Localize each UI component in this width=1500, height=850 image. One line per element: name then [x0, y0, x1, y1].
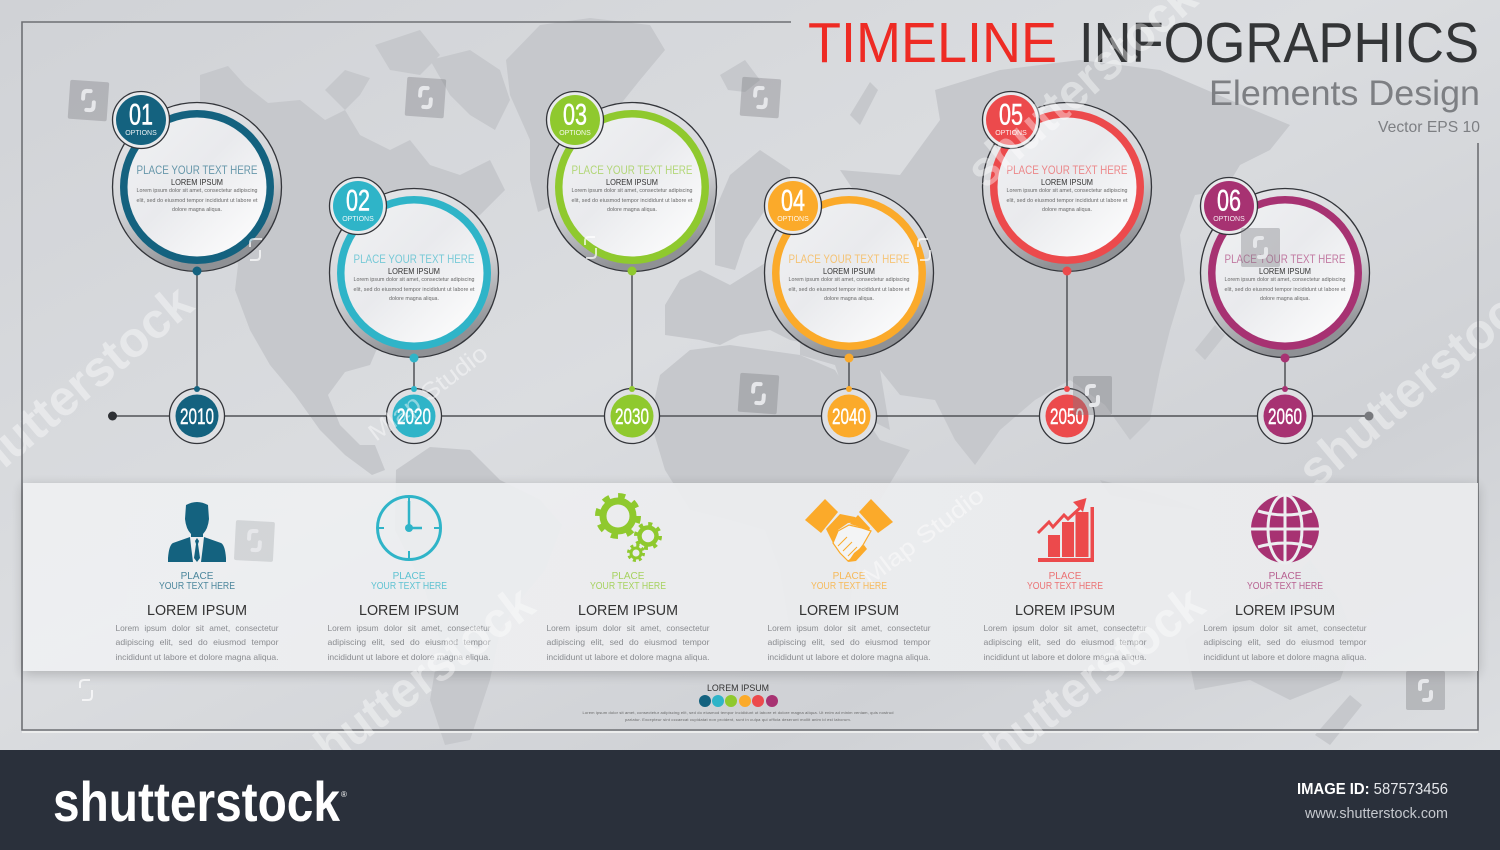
- column 4 text: Lorem ipsum dolor sit amet, consectetur: [768, 623, 931, 633]
- icon: gears: [598, 496, 660, 560]
- column 5 text: PLACE: [1049, 571, 1082, 582]
- milestone 01: 2010: [180, 404, 214, 429]
- milestone 04: [764, 178, 934, 444]
- column 4 text: incididunt ut labore et dolore magna aliqua.: [768, 652, 930, 662]
- column 2 text: Lorem ipsum dolor sit amet, consectetur: [328, 623, 491, 633]
- column 1 text: Lorem ipsum dolor sit amet, consectetur: [116, 623, 279, 633]
- watermark: studio lower: Mlap Studio: [857, 482, 989, 591]
- milestone 03: LOREM IPSUM: [606, 177, 658, 187]
- milestone 05: LOREM IPSUM: [1041, 177, 1093, 187]
- column 3 text: adipiscing elit, sed do eiusmod tempor: [546, 637, 710, 647]
- milestone 02: dolore magna aliqua.: [389, 296, 439, 302]
- milestone 04: OPTIONS: [777, 216, 809, 223]
- icon: clock: [378, 496, 440, 560]
- logo mark 3: [740, 77, 781, 118]
- panel: descriptions: [23, 483, 1478, 671]
- column 5 text: Lorem ipsum dolor sit amet, consectetur: [984, 623, 1147, 633]
- outline logo mark lower: [80, 680, 92, 700]
- milestone 04: dolore magna aliqua.: [824, 296, 874, 302]
- milestone 02: PLACE YOUR TEXT HERE: [354, 252, 474, 266]
- icon: growth chart: [1038, 498, 1094, 562]
- column 3 text: [546, 571, 710, 662]
- column 6 text: LOREM IPSUM: [1235, 602, 1335, 619]
- milestone 01: elit, sed do eiusmod tempor incididunt ut labore et: [136, 198, 258, 204]
- watermark: bottom right: shutterstock: [953, 574, 1214, 791]
- milestone 04: Lorem ipsum dolor sit amet, consectetur adipiscing: [788, 277, 910, 283]
- milestone 05: PLACE YOUR TEXT HERE: [1006, 163, 1128, 177]
- milestone 02: LOREM IPSUM: [388, 266, 440, 276]
- column 2 text: incididunt ut labore et dolore magna aliqua.: [328, 652, 490, 662]
- logo mark 7: [234, 520, 275, 562]
- column 3 text: LOREM IPSUM: [578, 602, 678, 619]
- column 1 text: PLACE: [181, 571, 214, 582]
- column 2 text: [328, 571, 491, 662]
- footer logo: ®: [341, 790, 347, 799]
- icon: handshake: [805, 499, 893, 562]
- milestone 02: Lorem ipsum dolor sit amet, consectetur adipiscing: [354, 277, 475, 283]
- world map: [200, 18, 1362, 745]
- column 6 text: adipiscing elit, sed do eiusmod tempor: [1204, 637, 1367, 647]
- column 3 text: PLACE: [612, 571, 645, 582]
- milestone 05: 05: [999, 98, 1023, 132]
- milestone 05: elit, sed do eiusmod tempor incididunt ut labore et: [1006, 198, 1128, 204]
- milestone 03: [546, 92, 716, 444]
- milestone 04: elit, sed do eiusmod tempor incididunt ut labore et: [788, 287, 910, 293]
- legend: [582, 683, 894, 722]
- column 1 text: YOUR TEXT HERE: [159, 581, 235, 592]
- column 5 text: [984, 571, 1147, 662]
- column 1 text: incididunt ut labore et dolore magna aliqua.: [116, 652, 278, 662]
- column 5 text: adipiscing elit, sed do eiusmod tempor: [984, 637, 1147, 647]
- milestone 06: 06: [1217, 184, 1241, 218]
- milestone 01: PLACE YOUR TEXT HERE: [136, 163, 258, 177]
- milestone 05: [982, 92, 1152, 444]
- milestone 02: 02: [346, 184, 370, 218]
- logo mark 4: [738, 373, 779, 414]
- icon: businessman: [168, 502, 226, 562]
- column 6 text: incididunt ut labore et dolore magna aliqua.: [1204, 652, 1366, 662]
- milestone 02: 2020: [397, 404, 431, 429]
- milestone 05: dolore magna aliqua.: [1042, 207, 1092, 213]
- milestone 01: [112, 92, 282, 444]
- milestone 01: OPTIONS: [125, 130, 157, 137]
- column 5 text: YOUR TEXT HERE: [1027, 581, 1103, 592]
- legend: Lorem ipsum dolor sit amet, consectetur adipiscing elit, sed do eiusmod tempor incididunt ut labore et dolore magna aliqua. Ut enim ad minim veniam, quis nostrud: [582, 710, 894, 715]
- footer bar: [0, 750, 1500, 850]
- milestone 06: LOREM IPSUM: [1259, 266, 1311, 276]
- milestone 02: OPTIONS: [342, 216, 374, 223]
- vector note: Vector EPS 10: [1378, 119, 1480, 136]
- milestone 06: Lorem ipsum dolor sit amet, consectetur adipiscing: [1224, 277, 1346, 283]
- title: INFOGRAPHICS: [1079, 11, 1479, 75]
- icon: globe: [1251, 495, 1319, 563]
- milestone 01: Lorem ipsum dolor sit amet, consectetur adipiscing: [136, 188, 258, 194]
- milestone 02: elit, sed do eiusmod tempor incididunt ut labore et: [354, 287, 475, 293]
- legend: LOREM IPSUM: [707, 683, 769, 693]
- milestone 06: PLACE YOUR TEXT HERE: [1224, 252, 1346, 266]
- milestone 03: elit, sed do eiusmod tempor incididunt ut labore et: [572, 198, 693, 204]
- milestone 01: dolore magna aliqua.: [172, 207, 222, 213]
- milestone 03: dolore magna aliqua.: [607, 207, 657, 213]
- watermark: studio upper: Mlap Studio: [363, 340, 493, 447]
- milestone 03: OPTIONS: [559, 130, 591, 137]
- column 1 text: LOREM IPSUM: [147, 602, 247, 619]
- milestone 03: 2030: [615, 404, 649, 429]
- column 2 text: YOUR TEXT HERE: [371, 581, 447, 592]
- column 2 text: LOREM IPSUM: [359, 602, 459, 619]
- column 4 text: [768, 571, 931, 662]
- milestone 05: OPTIONS: [995, 130, 1027, 137]
- subtitle: Elements Design: [1209, 74, 1480, 113]
- column 4 text: PLACE: [833, 571, 866, 582]
- milestone 06: [1200, 178, 1370, 444]
- milestone 06: dolore magna aliqua.: [1260, 296, 1310, 302]
- column 6 text: YOUR TEXT HERE: [1247, 581, 1323, 592]
- column 6 text: PLACE: [1269, 571, 1302, 582]
- column 5 text: incididunt ut labore et dolore magna aliqua.: [984, 652, 1146, 662]
- milestone 04: LOREM IPSUM: [823, 266, 875, 276]
- image id: IMAGE ID: 587573456: [1297, 781, 1448, 798]
- column 4 text: YOUR TEXT HERE: [811, 581, 887, 592]
- logo mark 1: [68, 80, 109, 121]
- column 5 text: LOREM IPSUM: [1015, 602, 1115, 619]
- column 2 text: PLACE: [393, 571, 426, 582]
- website: www.shutterstock.com: [1304, 806, 1448, 822]
- column 3 text: YOUR TEXT HERE: [590, 581, 666, 592]
- milestone 02: [330, 178, 498, 444]
- milestone 01: 01: [129, 98, 153, 132]
- outline logo marks: [250, 237, 930, 260]
- column 4 text: adipiscing elit, sed do eiusmod tempor: [768, 637, 931, 647]
- milestone 05: 2050: [1050, 404, 1084, 429]
- legend: pariatur. Excepteur sint occaecat cupidatat non proident, sunt in culpa qui officia deserunt mollit anim id est laborum.: [625, 717, 851, 722]
- logo mark 6: [1241, 228, 1280, 267]
- timeline axis: [108, 412, 1374, 420]
- column 6 text: Lorem ipsum dolor sit amet, consectetur: [1204, 623, 1367, 633]
- title: [808, 11, 1479, 75]
- milestone 03: PLACE YOUR TEXT HERE: [572, 163, 692, 177]
- column 4 text: LOREM IPSUM: [799, 602, 899, 619]
- logo mark 8: [1406, 671, 1445, 710]
- logo mark 2: [405, 77, 446, 118]
- column 2 text: adipiscing elit, sed do eiusmod tempor: [328, 637, 491, 647]
- column 1 text: [116, 571, 279, 662]
- milestone 05: Lorem ipsum dolor sit amet, consectetur adipiscing: [1006, 188, 1128, 194]
- column 1 text: adipiscing elit, sed do eiusmod tempor: [116, 637, 279, 647]
- column 6 text: [1204, 571, 1367, 662]
- milestone 06: elit, sed do eiusmod tempor incididunt ut labore et: [1224, 287, 1346, 293]
- footer logo: shutterstock: [53, 770, 341, 833]
- watermark: bottom left: shutterstock: [283, 574, 544, 791]
- column 3 text: Lorem ipsum dolor sit amet, consectetur: [546, 623, 710, 633]
- milestone 06: OPTIONS: [1213, 216, 1245, 223]
- milestone 03: 03: [563, 98, 587, 132]
- milestone 04: 04: [781, 184, 805, 218]
- milestone 06: 2060: [1268, 404, 1302, 429]
- column 3 text: incididunt ut labore et dolore magna aliqua.: [546, 652, 710, 662]
- title: TIMELINE: [808, 11, 1057, 75]
- milestone 03: Lorem ipsum dolor sit amet, consectetur adipiscing: [572, 188, 693, 194]
- milestone 04: 2040: [832, 404, 866, 429]
- logo mark 5: [1073, 376, 1112, 415]
- milestone 01: LOREM IPSUM: [171, 177, 223, 187]
- milestone 04: PLACE YOUR TEXT HERE: [788, 252, 910, 266]
